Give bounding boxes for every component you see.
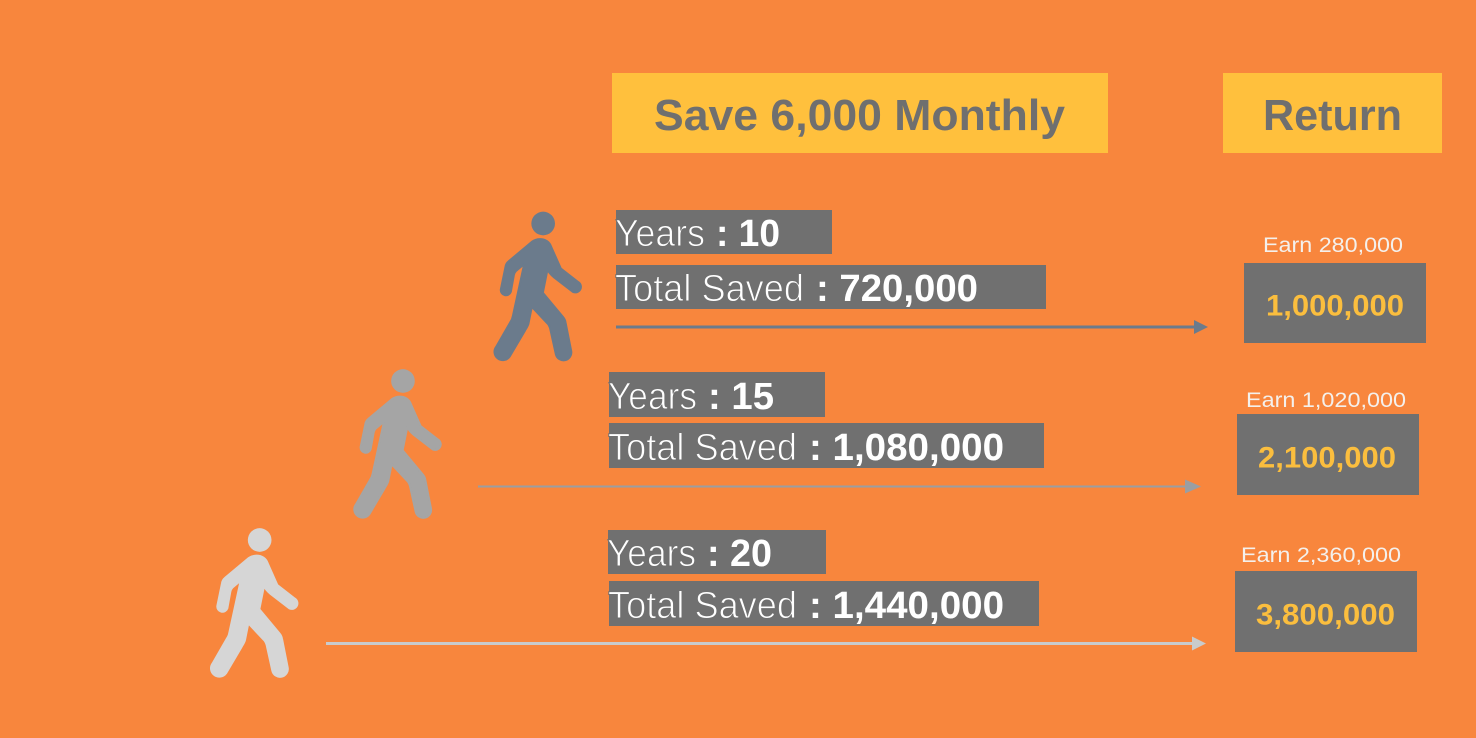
heading: save monthly: Save 6,000 Monthly bbox=[654, 91, 1066, 140]
row: 15 years total saved: Total Saved bbox=[608, 427, 797, 469]
row: 20 years total saved bbox=[608, 581, 1039, 627]
return: 10 years: 1,000,000 bbox=[1266, 290, 1404, 322]
row: 15 years total saved: : 1,080,000 bbox=[809, 427, 1004, 469]
icon: walking person, medium bbox=[354, 369, 441, 518]
return: 20 years bbox=[1235, 544, 1417, 652]
row: 10 years years label: Years bbox=[615, 213, 705, 255]
return: 15 years bbox=[1237, 389, 1419, 495]
return: 15 years: 2,100,000 bbox=[1258, 442, 1396, 474]
heading: return bbox=[1223, 73, 1442, 153]
row: 20 years total saved: Total Saved bbox=[608, 585, 797, 627]
row: 10 years total saved: : 720,000 bbox=[816, 268, 978, 310]
row: 15 years years label: Years bbox=[608, 376, 697, 418]
icon: walking person, light bbox=[211, 528, 297, 677]
arrow: 15 years bbox=[478, 486, 1189, 488]
arrow: 10 years bbox=[616, 326, 1198, 328]
return: 15 years: Earn 1,020,000 bbox=[1246, 389, 1406, 412]
row: 10 years total saved: Total Saved bbox=[615, 268, 804, 310]
row: 15 years total saved bbox=[608, 423, 1044, 469]
row: 20 years years label bbox=[607, 530, 826, 575]
row: 10 years years label: : 10 bbox=[716, 213, 780, 255]
row: 20 years years label: : 20 bbox=[707, 533, 772, 575]
return: 20 years: 3,800,000 bbox=[1256, 598, 1395, 632]
icon: walking person, dark bbox=[494, 212, 581, 360]
row: 10 years total saved bbox=[615, 265, 1046, 310]
heading: save monthly bbox=[612, 73, 1108, 153]
heading: return: Return bbox=[1263, 91, 1402, 140]
row: 10 years years label bbox=[615, 210, 832, 255]
row: 20 years total saved: : 1,440,000 bbox=[809, 585, 1004, 627]
return: 10 years: Earn 280,000 bbox=[1263, 234, 1403, 257]
return: 20 years: Earn 2,360,000 bbox=[1241, 544, 1401, 567]
row: 15 years years label: : 15 bbox=[708, 376, 774, 418]
arrow: 20 years bbox=[326, 642, 1196, 645]
row: 15 years years label bbox=[608, 372, 825, 418]
row: 20 years years label: Years bbox=[607, 533, 696, 575]
return: 10 years bbox=[1244, 234, 1426, 343]
